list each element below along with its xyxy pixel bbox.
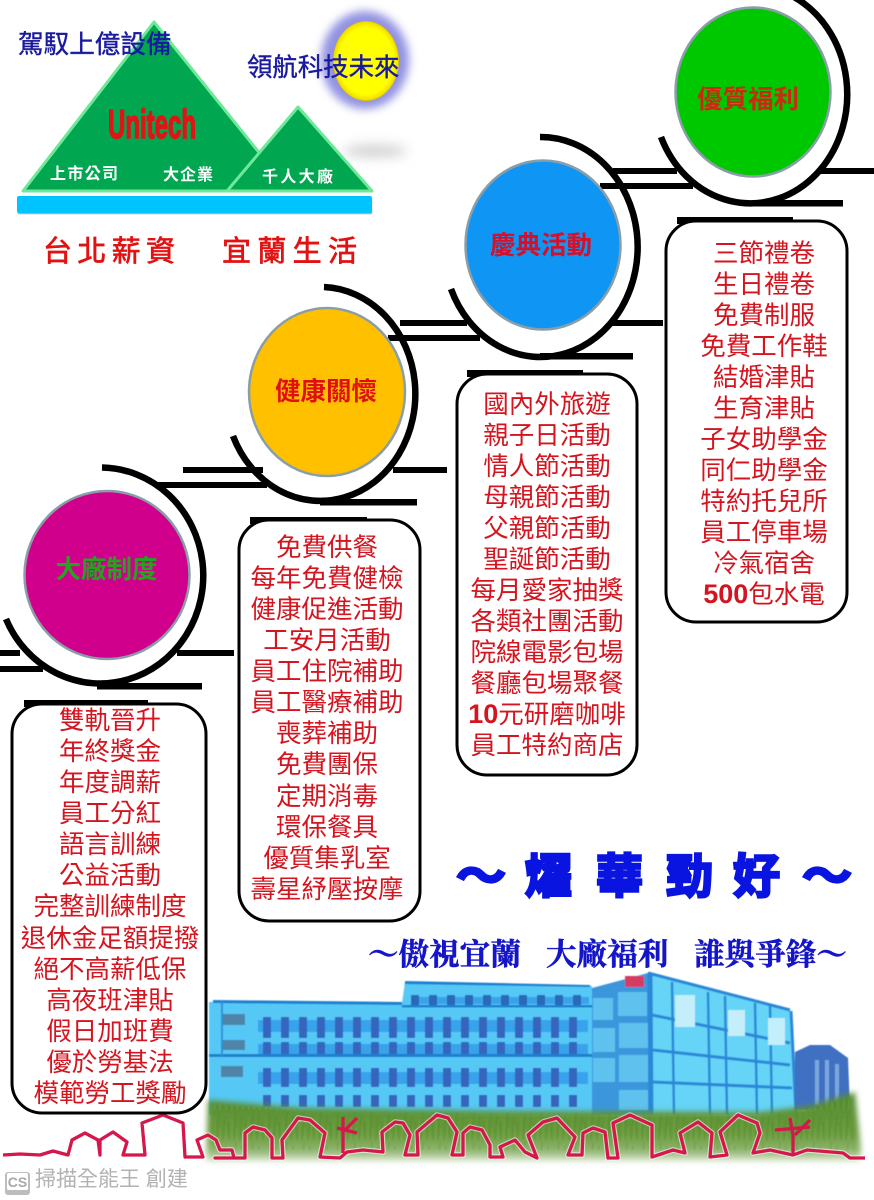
left wing floor lines <box>213 1000 402 1005</box>
box 1 items: 雙軌晉升 <box>59 707 161 735</box>
box 4 items <box>700 240 828 609</box>
large factory label: 千人大廠 <box>262 167 333 186</box>
box 4 items: 免費制服 <box>713 302 815 330</box>
cyan base shadow <box>18 200 372 214</box>
box 3 items: 員工特約商店 <box>470 732 624 760</box>
subtitle: 誰與爭鋒～ <box>694 930 847 974</box>
box 2 items: 健康促進活動 <box>250 596 404 624</box>
Unitech wordmark: Unitech <box>108 101 196 147</box>
window rows <box>263 1017 585 1107</box>
title character 2: 華 <box>596 850 643 903</box>
arc 4 <box>661 0 847 203</box>
panel: celebrations list <box>457 374 637 775</box>
step 4: premium benefits <box>661 0 847 203</box>
sun <box>333 21 399 101</box>
box 3 <box>457 374 637 775</box>
box 1 items: 退休金足額提撥 <box>21 925 199 953</box>
box 4 items: 生育津貼 <box>713 395 815 423</box>
box 4 items: 生日禮卷 <box>713 271 815 299</box>
slogan: technology: 領航科技未來 <box>247 54 399 82</box>
title right tilde: ～ <box>802 850 852 903</box>
small mountain <box>227 107 372 191</box>
right block frame <box>648 973 796 1115</box>
box 1 items: 高夜班津貼 <box>46 987 174 1015</box>
box 3 items: 國內外旅遊 <box>483 391 611 419</box>
box 4 <box>666 221 847 622</box>
cyan base <box>17 196 372 213</box>
box 1 items: 年終獎金 <box>59 738 161 766</box>
enterprise label: 大企業 <box>163 165 213 184</box>
skyline red line <box>3 1115 865 1158</box>
box 2 items: 壽星紓壓按摩 <box>250 876 404 904</box>
box 1 items <box>21 707 199 1108</box>
skyline halo <box>3 1115 865 1158</box>
end-wall windows <box>221 1014 245 1077</box>
box 3 items: 聖誕節活動 <box>483 546 611 574</box>
circle 3 <box>466 160 620 330</box>
box 3 items: 院線電影包場 <box>470 639 624 667</box>
far building panes <box>815 1060 839 1105</box>
left wing <box>209 973 850 1115</box>
box 2 items: 員工醫療補助 <box>250 689 404 717</box>
step 3: celebrations <box>451 137 638 357</box>
box 2 items: 優質集乳室 <box>263 845 391 873</box>
box 3 items: 餐廳包場聚餐 <box>470 670 624 698</box>
title left tilde: ～ <box>456 850 506 903</box>
box 2 items <box>250 534 404 904</box>
circle 2 <box>249 308 405 476</box>
circle 1 <box>24 491 190 659</box>
box 1 items: 模範勞工獎勵 <box>33 1080 187 1108</box>
box 1 items: 語言訓練 <box>59 831 161 859</box>
box 3 items: 父親節活動 <box>483 515 611 543</box>
slogan: Yilan living: 宜蘭生活 <box>222 235 357 268</box>
box 1 items: 優於勞基法 <box>46 1049 174 1077</box>
panel: premium benefits list <box>666 221 847 622</box>
skyline line art <box>3 1115 865 1158</box>
box 4 items: 特約托兒所 <box>700 488 828 516</box>
logo: mountains, sun and slogans <box>17 11 409 268</box>
box 1 items: 員工分紅 <box>59 800 161 828</box>
box 4 items: 同仁助學金 <box>700 457 828 485</box>
circle 4 label: 優質福利 <box>697 86 799 114</box>
middle block panes <box>593 992 648 1110</box>
step 2: health care <box>233 287 415 501</box>
box 1 items: 完整訓練制度 <box>33 893 187 921</box>
box 2 items: 定期消毒 <box>276 783 378 811</box>
circle 1 label: 大廠制度 <box>55 555 158 584</box>
circle 2 label: 健康關懷 <box>275 378 377 406</box>
box 4 items: 員工停車場 <box>700 519 828 547</box>
box 3 items: 10元研磨咖啡 <box>468 699 626 729</box>
box 3 items: 每月愛家抽獎 <box>470 577 624 605</box>
box 3 items: 情人節活動 <box>483 453 611 481</box>
connector bars <box>0 168 874 707</box>
icon: CamScanner logo <box>5 1172 30 1195</box>
slogan: Taipei salary: 台北薪資 <box>43 235 175 268</box>
right block pale window strips <box>675 995 785 1045</box>
box 4 items: 三節禮卷 <box>713 240 815 268</box>
box 3 items: 各類社團活動 <box>470 608 624 636</box>
box 4 items: 冷氣宿舍 <box>713 550 815 578</box>
box 2 items: 免費供餐 <box>276 534 378 562</box>
red sign on building <box>625 976 644 987</box>
box 1 items: 年度調薪 <box>59 769 161 797</box>
listed company label: 上市公司 <box>50 164 118 183</box>
box 2 <box>239 520 420 921</box>
upper window row <box>411 995 589 1005</box>
watermark <box>5 1168 188 1195</box>
box 2 items: 喪葬補助 <box>276 720 378 748</box>
box 1 <box>12 704 206 1113</box>
circle 3 label: 慶典活動 <box>490 232 592 260</box>
title character 3: 勁 <box>666 850 713 903</box>
arc 1 <box>6 468 203 683</box>
box 4 items: 500包水電 <box>703 579 825 609</box>
watermark text: 掃描全能王 創建 <box>35 1168 188 1191</box>
banner title <box>456 850 852 903</box>
box 2 items: 員工住院補助 <box>250 658 404 686</box>
arc 2 <box>233 287 415 501</box>
window bands <box>258 997 589 1084</box>
panel: health care list <box>239 520 420 921</box>
box 4 items: 子女助學金 <box>700 426 828 454</box>
middle block <box>592 973 651 1115</box>
box 3 items: 親子日活動 <box>483 422 611 450</box>
panel: factory system list <box>12 704 206 1113</box>
box 4 items: 結婚津貼 <box>713 364 815 392</box>
box 3 items: 母親節活動 <box>483 484 611 512</box>
title character 4: 好 <box>733 850 780 903</box>
step 1: factory system <box>6 468 203 683</box>
sun glow <box>321 11 409 109</box>
box 2 items: 每年免費健檢 <box>250 565 404 593</box>
sun shadow <box>343 145 407 157</box>
box 4 items: 免費工作鞋 <box>700 333 828 361</box>
subtitle: ～傲視宜蘭 <box>368 930 521 974</box>
circle 4 <box>676 8 830 176</box>
box 3 items <box>468 391 626 760</box>
subtitle: 大廠福利 <box>546 930 668 974</box>
large mountain <box>23 22 290 191</box>
factory photo <box>206 973 861 1161</box>
box 1 items: 公益活動 <box>59 862 161 890</box>
box 2 items: 環保餐具 <box>276 814 378 842</box>
icon: CamScanner logo: CS <box>8 1174 27 1190</box>
arc 3 <box>451 137 638 357</box>
box 2 items: 免費團保 <box>276 751 378 779</box>
box 1 items: 假日加班費 <box>46 1018 174 1046</box>
box 1 items: 絕不高薪低保 <box>33 956 187 984</box>
slogan: equipment: 駕馭上億設備 <box>18 30 172 59</box>
right block <box>648 973 797 1115</box>
far building <box>795 1045 850 1110</box>
grass <box>206 1092 861 1161</box>
box 2 items: 工安月活動 <box>263 627 391 655</box>
title characters: 燿 <box>525 850 572 903</box>
